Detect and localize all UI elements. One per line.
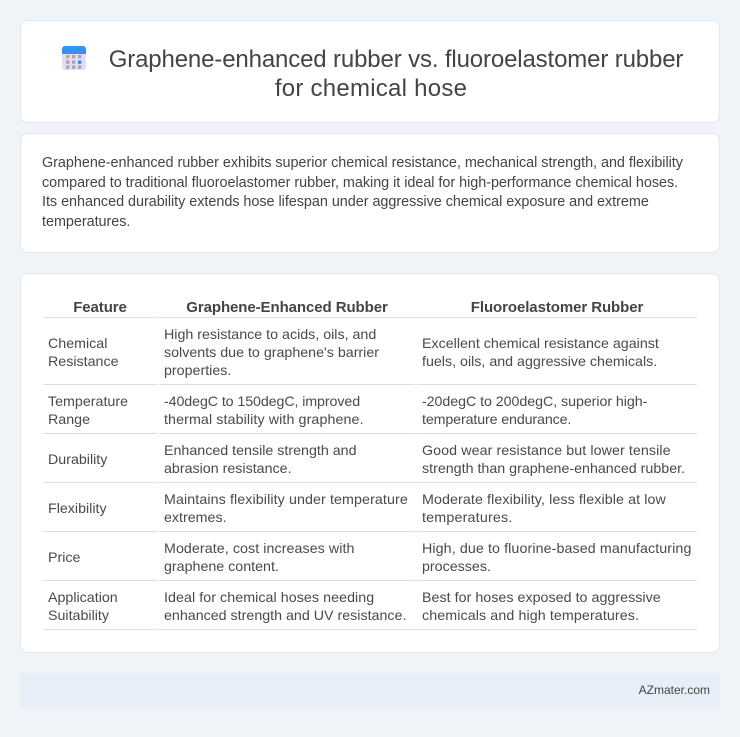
comparison table: thermal stability with graphene.	[164, 412, 364, 428]
comparison table: Price	[48, 550, 80, 566]
comparison table: Moderate flexibility, less flexible at low	[422, 492, 666, 508]
title: for chemical hose	[275, 75, 467, 102]
comparison table: -20degC to 200degC, superior high-	[422, 394, 647, 410]
comparison table: -40degC to 150degC, improved	[164, 394, 360, 410]
row: temperature range	[43, 394, 697, 434]
table header	[43, 299, 697, 318]
comparison table: Resistance	[48, 354, 118, 370]
comparison table: High, due to fluorine-based manufacturing	[422, 541, 691, 557]
comparison table: strength than graphene-enhanced rubber.	[422, 461, 685, 477]
comparison table: Durability	[48, 452, 107, 468]
comparison table: temperature endurance.	[422, 412, 571, 428]
comparison table: Moderate, cost increases with	[164, 541, 355, 557]
summary text: temperatures.	[42, 214, 130, 230]
comparison table: Good wear resistance but lower tensile	[422, 443, 671, 459]
comparison table: temperatures.	[422, 510, 513, 526]
comparison table: enhanced strength and UV resistance.	[164, 608, 406, 624]
summary text: Its enhanced durability extends hose lifespan under aggressive chemical exposure and extreme	[42, 194, 649, 210]
comparison table: graphene content.	[164, 559, 279, 575]
comparison table: High resistance to acids, oils, and	[164, 327, 376, 343]
comparison table: chemicals and high temperatures.	[422, 608, 639, 624]
panel: comparison table card	[20, 273, 720, 653]
comparison table: Enhanced tensile strength and	[164, 443, 357, 459]
comparison table: Application	[48, 590, 118, 606]
comparison table: processes.	[422, 559, 491, 575]
comparison table: Maintains flexibility under temperature	[164, 492, 408, 508]
summary text: Graphene-enhanced rubber exhibits superior chemical resistance, mechanical strength, and flexibility	[42, 155, 683, 171]
comparison table: abrasion resistance.	[164, 461, 292, 477]
footer source: AZmater.com	[639, 683, 710, 697]
comparison table: properties.	[164, 363, 231, 379]
panel: summary card	[20, 133, 720, 253]
comparison table: Fluoroelastomer Rubber	[471, 299, 643, 316]
panel: title card	[20, 20, 720, 123]
row: application suitability	[43, 590, 697, 630]
summary text	[42, 155, 683, 230]
row: durability	[43, 443, 697, 483]
comparison table: Chemical	[48, 336, 107, 352]
comparison table: Excellent chemical resistance against	[422, 336, 659, 352]
comparison table: extremes.	[164, 510, 227, 526]
comparison table: Temperature	[48, 394, 128, 410]
comparison table: Best for hoses exposed to aggressive	[422, 590, 661, 606]
row: price	[43, 541, 697, 581]
comparison table: Feature	[73, 299, 127, 316]
row: chemical resistance	[43, 327, 697, 385]
comparison table: Flexibility	[48, 501, 107, 517]
summary text: compared to traditional fluoroelastomer rubber, making it ideal for high-performance chemical hoses.	[42, 175, 678, 191]
comparison table: fuels, oils, and aggressive chemicals.	[422, 354, 657, 370]
comparison table: Suitability	[48, 608, 109, 624]
comparison table: solvents due to graphene's barrier	[164, 345, 379, 361]
comparison table: Graphene-Enhanced Rubber	[186, 299, 388, 316]
comparison table: Ideal for chemical hoses needing	[164, 590, 374, 606]
comparison table: Range	[48, 412, 90, 428]
row: flexibility	[43, 492, 697, 532]
footer bar	[20, 673, 720, 707]
title	[109, 46, 683, 102]
title: Graphene-enhanced rubber vs. fluoroelastomer rubber	[109, 46, 683, 73]
icon: calendar	[62, 46, 86, 70]
